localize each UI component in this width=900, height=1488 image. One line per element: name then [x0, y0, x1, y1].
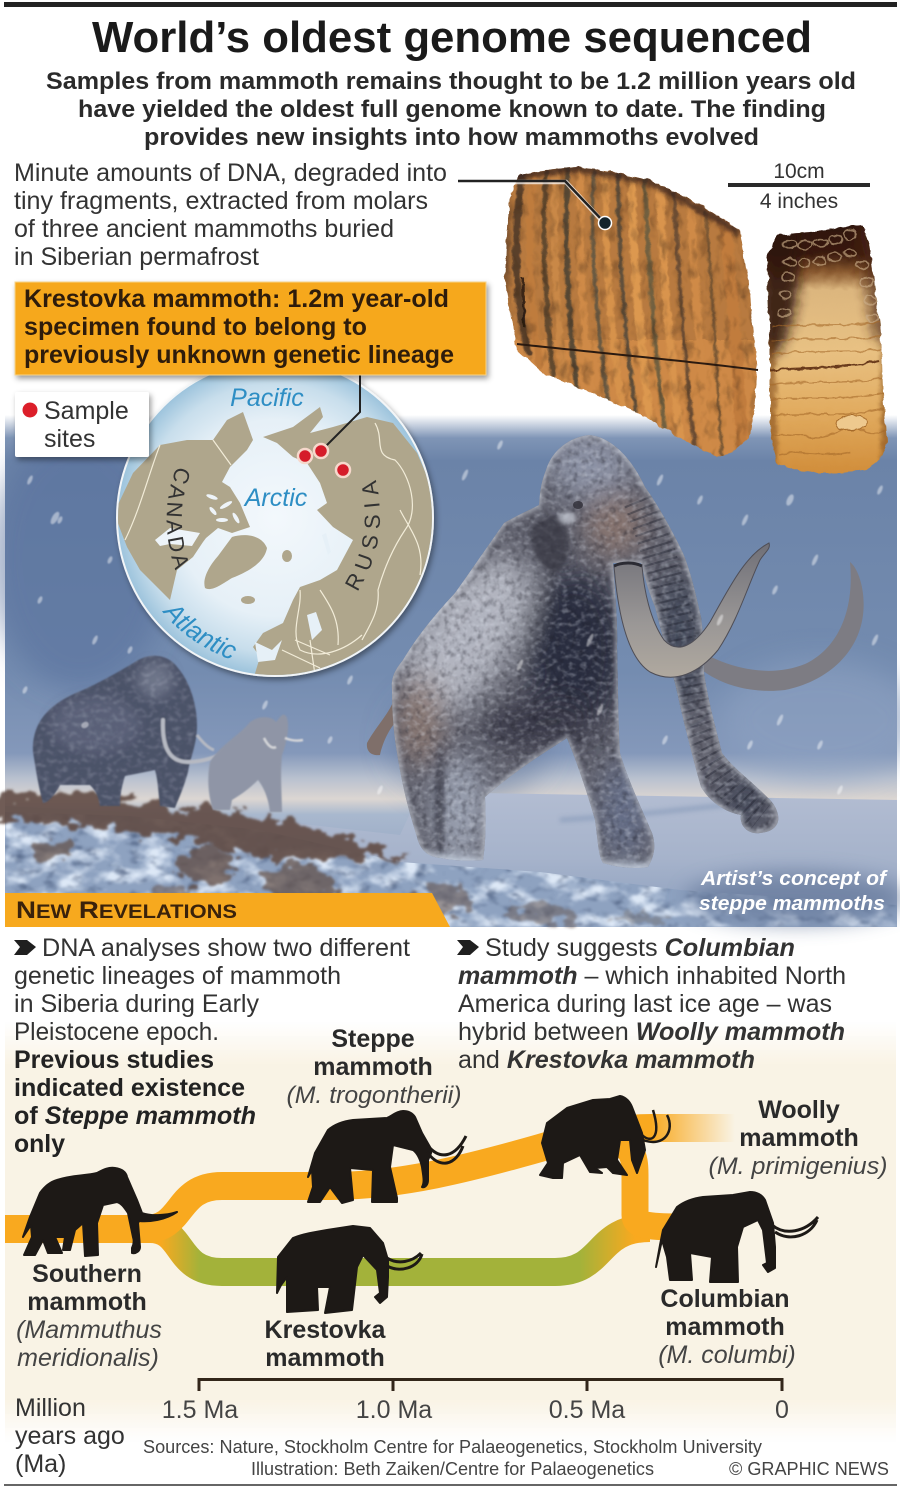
title: World’s oldest genome sequenced	[92, 13, 812, 62]
borders	[125, 423, 421, 675]
hybrid connector to Columbian mammoth	[610, 1140, 680, 1227]
subtitle: Samples from mammoth remains thought to be 1.2 million years old	[46, 68, 856, 95]
time axis	[162, 1379, 789, 1424]
label: columbian mammoth: mammoth	[665, 1313, 785, 1341]
big mammoth ear and eye	[530, 501, 583, 572]
krestovka mammoth silhouette	[277, 1226, 422, 1313]
legend: sample sites	[15, 392, 149, 457]
country labels	[166, 468, 380, 591]
big mammoth tail	[367, 700, 396, 755]
columbian mammoth silhouette	[656, 1192, 818, 1282]
label: columbian mammoth: Columbian	[660, 1285, 790, 1313]
right text column: America during last ice age – was	[458, 990, 832, 1018]
time axis: 0	[775, 1396, 789, 1424]
hind leg separation	[435, 742, 445, 858]
left text column: only	[14, 1130, 65, 1158]
left text column: DNA analyses show two different	[42, 934, 410, 962]
sources credit: Sources: Nature, Stockholm Centre for Palaeogenetics, Stockholm University	[143, 1437, 762, 1457]
lineage chart	[5, 1025, 888, 1372]
snow ground	[5, 790, 897, 927]
intro text: Minute amounts of DNA, degraded into	[14, 159, 447, 187]
left text column: genetic lineages of mammoth	[14, 962, 341, 990]
axis unit label: years ago	[15, 1422, 125, 1450]
left text column	[14, 934, 410, 1158]
far mammoth adult	[32, 655, 216, 809]
label: woolly mammoth: mammoth	[739, 1124, 859, 1152]
label: southern mammoth	[16, 1260, 162, 1372]
sample site connector	[321, 375, 360, 451]
fur texture	[392, 436, 773, 868]
caption: artist's concept: steppe mammoths	[699, 893, 885, 915]
intro text	[14, 159, 447, 271]
label: woolly mammoth	[708, 1096, 888, 1180]
Svalbard	[282, 550, 292, 562]
left text column: Previous studies	[14, 1046, 214, 1074]
ocean labels: Arctic	[243, 484, 308, 512]
right text column	[457, 934, 846, 1074]
subtitle	[46, 68, 856, 151]
photo: mammoth molar, side view	[500, 160, 765, 460]
far mammoth calf	[208, 715, 303, 812]
fading woolly band	[650, 1114, 735, 1142]
species labels	[16, 1025, 888, 1372]
ocean labels: Pacific	[230, 384, 304, 412]
left text column: Pleistocene epoch.	[14, 1018, 219, 1046]
intro text: of three ancient mammoths buried	[14, 215, 394, 243]
label: southern mammoth: (Mammuthus	[16, 1316, 162, 1344]
right text column: Study suggests Columbian	[485, 934, 795, 962]
near tusk	[614, 543, 769, 677]
trunk wrinkles	[640, 500, 762, 815]
bottom rule	[4, 1484, 897, 1486]
Hudson Bay	[155, 528, 200, 546]
label: steppe mammoth	[286, 1025, 462, 1109]
sources credit: Illustration: Beth Zaiken/Centre for Palaeogenetics	[251, 1459, 654, 1479]
land masses	[114, 407, 436, 680]
globe map: Arctic	[115, 376, 440, 684]
snow at feet	[424, 848, 652, 868]
caption: artist's concept: Artist’s concept of	[700, 868, 888, 890]
country labels: RUSSIA	[345, 480, 380, 591]
ocean labels	[162, 384, 308, 658]
bullet marker	[457, 940, 479, 955]
leader line to molar	[458, 181, 612, 230]
Iceland	[241, 596, 255, 604]
Greenland	[204, 535, 267, 589]
subtitle: have yielded the oldest full genome known to date. The finding	[78, 96, 826, 123]
label: krestovka mammoth: mammoth	[265, 1344, 385, 1372]
right text column: hybrid between Woolly mammoth	[458, 1018, 845, 1046]
subtitle: provides new insights into how mammoths evolved	[144, 124, 759, 151]
left text column: of Steppe mammoth	[14, 1102, 256, 1130]
North America	[114, 412, 253, 600]
orange callout: Krestovka mammoth	[15, 282, 486, 375]
archipelago channels	[206, 493, 241, 524]
scale bar: 10cm	[773, 160, 825, 183]
time axis: 1.5 Ma	[162, 1396, 238, 1424]
intro text: in Siberian permafrost	[14, 243, 259, 271]
scale bar	[728, 160, 870, 213]
label: southern mammoth: mammoth	[27, 1288, 147, 1316]
label: southern mammoth: Southern	[32, 1260, 142, 1288]
label: steppe mammoth: mammoth	[313, 1053, 433, 1081]
axis unit label: (Ma)	[15, 1450, 66, 1478]
shade behind caption	[685, 872, 900, 924]
time axis: 1.0 Ma	[356, 1396, 432, 1424]
copyright: © GRAPHIC NEWS	[729, 1459, 889, 1479]
axis unit label	[15, 1394, 125, 1478]
scale bar: 4 inches	[760, 190, 838, 213]
cream chart background	[5, 1022, 896, 1442]
top rule	[4, 2, 897, 7]
label: steppe mammoth: (M. trogontherii)	[286, 1082, 462, 1109]
axis unit label: Million	[15, 1394, 86, 1422]
chest shadow on tusk base	[614, 563, 642, 566]
label: krestovka mammoth: Krestovka	[265, 1316, 387, 1344]
ocean labels: Atlantic	[162, 608, 236, 658]
right text column: mammoth – which inhabited North	[458, 962, 846, 990]
label: southern mammoth: meridionalis)	[17, 1344, 159, 1372]
orange callout: Krestovka mammoth: previously unknown genetic lineage	[24, 341, 454, 369]
photo: mammoth molar, cross section	[766, 225, 888, 474]
sky shading	[0, 430, 900, 800]
sample site dots	[298, 444, 350, 477]
section banner: new revelations	[5, 893, 450, 927]
orange callout: Krestovka mammoth: specimen found to belong to	[24, 313, 367, 341]
sky background	[5, 415, 897, 927]
bullet marker	[14, 940, 36, 955]
right text column: and Krestovka mammoth	[458, 1046, 755, 1074]
steppe mammoth silhouette	[308, 1111, 466, 1203]
orange ancestral band	[5, 1215, 155, 1243]
left text column: in Siberia during Early	[14, 990, 259, 1018]
sources credit	[143, 1437, 762, 1479]
section banner: new revelations: NEW REVELATIONS	[16, 897, 237, 924]
label: columbian mammoth: (M. columbi)	[658, 1341, 796, 1369]
legend: sample sites: Sample	[44, 397, 129, 425]
southern mammoth silhouette	[23, 1168, 177, 1256]
label: woolly mammoth: (M. primigenius)	[708, 1153, 888, 1180]
left text column: indicated existence	[14, 1074, 245, 1102]
big steppe mammoth body	[392, 435, 778, 868]
country labels: CANADA	[166, 468, 190, 570]
Russia and Europe	[253, 407, 436, 680]
dry grass on ridge	[0, 794, 666, 925]
caption: artist's concept	[699, 868, 888, 915]
snowfall	[21, 440, 884, 795]
woolly mammoth silhouette	[540, 1096, 670, 1178]
label: woolly mammoth: Woolly	[758, 1096, 840, 1124]
far tusk	[702, 562, 864, 691]
illustration: mammoths in snowy landscape	[0, 415, 900, 927]
intro text: tiny fragments, extracted from molars	[14, 187, 428, 215]
legend: sample sites: sites	[44, 425, 95, 453]
green Krestovka lineage band	[150, 1228, 650, 1272]
globe ocean	[117, 360, 433, 676]
frost rim	[392, 435, 778, 868]
orange steppe band	[145, 1128, 652, 1229]
label: columbian mammoth	[658, 1285, 796, 1369]
molar crack line	[517, 344, 758, 370]
Baltic and Novaya Zemlya gaps	[255, 612, 322, 662]
label: krestovka mammoth	[265, 1316, 387, 1372]
orange callout: Krestovka mammoth: Krestovka mammoth: 1.2m year-old	[24, 285, 449, 313]
label: steppe mammoth: Steppe	[331, 1025, 415, 1053]
time axis: 0.5 Ma	[549, 1396, 625, 1424]
